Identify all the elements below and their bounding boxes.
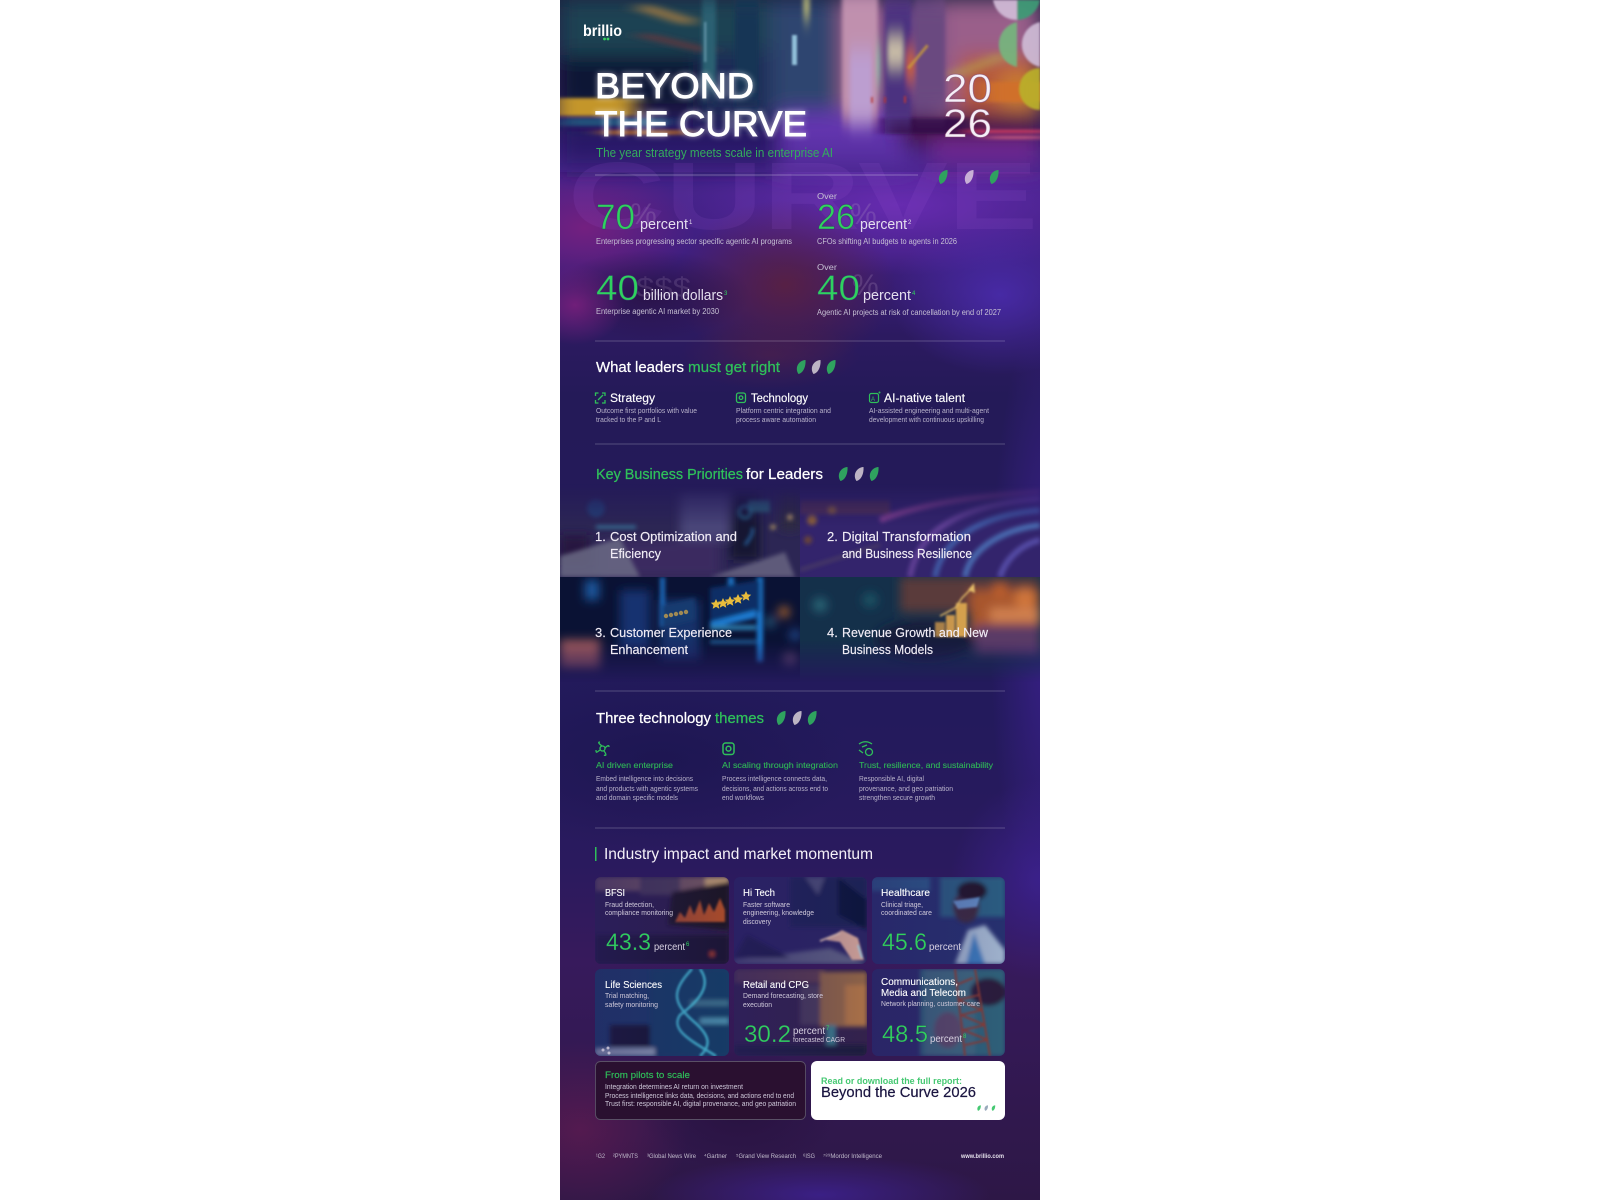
item: strategy: Outcome first portfolios with value [596, 406, 697, 415]
heading: industry impact: Industry impact and market momentum [604, 846, 873, 863]
item: technology: Platform centric integration and [736, 406, 831, 415]
item: strategy: tracked to the P and L [596, 415, 661, 424]
stat: over 40 percent: Agentic AI projects at risk of cancellation by end of 2027 [817, 308, 1002, 317]
theme: AI scaling through integration: end workflows [722, 793, 764, 802]
year 2026 [944, 74, 991, 138]
stat: 40 billion dollars: Enterprise agentic AI market by 2030 [596, 307, 720, 316]
heading: what leaders must get right: What leaders [596, 359, 684, 376]
card: communications, media and telecom: Network planning, customer care [881, 999, 980, 1008]
theme: trust, resilience, sustainability: Trust, resilience, and sustainability [859, 760, 994, 770]
priority 1: cost optimization: 1. [595, 529, 606, 544]
card: Retail and CPG: 30.2 [744, 1021, 791, 1048]
priority 4: revenue growth: Revenue Growth and New [842, 625, 989, 640]
stat: 40 billion dollars: billion dollars [643, 287, 723, 304]
callout: from pilots to scale: Trust first: responsible AI, digital provenance, and geo patriation [605, 1099, 796, 1108]
card: Retail and CPG: Retail and CPG [743, 979, 809, 991]
heading: key business priorities: for Leaders [746, 466, 823, 483]
card: BFSI [595, 877, 729, 964]
card: Retail and CPG: Demand forecasting, store [743, 991, 823, 1000]
leaf motif: hero [939, 170, 999, 184]
website url: www.brillio.com [960, 1153, 1004, 1160]
ghost word CURVE: CURVE [568, 143, 1038, 250]
card: BFSI: percent [654, 942, 685, 953]
stat: 40 billion dollars: 3 [724, 291, 728, 297]
card: Healthcare: coordinated care [881, 908, 932, 917]
card: Life Sciences: Life Sciences [605, 979, 662, 991]
title: THE CURVE [595, 105, 807, 144]
heading: key business priorities: Key Business Priorities [596, 466, 743, 483]
logo: brillio: brillio [583, 23, 622, 40]
item: AI-native talent: development with continuous upskilling [869, 415, 984, 424]
card: Hi Tech: engineering, knowledge [743, 908, 814, 917]
item: strategy [596, 393, 697, 424]
card: Healthcare: percent [929, 942, 961, 953]
footnote sources: ²PYMNTS [613, 1154, 638, 1160]
priority 4: revenue growth: Business Models [842, 642, 933, 657]
card: BFSI: BFSI [605, 887, 625, 899]
stat: 40 billion dollars [596, 275, 728, 316]
theme: AI driven enterprise: and domain specific models [596, 793, 678, 802]
card: Healthcare: Clinical triage, [881, 900, 923, 909]
card: Retail and CPG: percent [793, 1026, 825, 1037]
year 2026: 26 [943, 102, 992, 146]
stat: 70 percent: 1 [689, 220, 693, 226]
card: communications, media and telecom: 48.5 [882, 1021, 928, 1048]
card: Retail and CPG [734, 969, 867, 1056]
stat: 70 percent: 70 [596, 198, 635, 237]
card: Life Sciences: Trial matching, [605, 991, 649, 1000]
heading: key business priorities [596, 466, 879, 483]
year 2026: 20 [943, 67, 992, 111]
theme: AI scaling through integration: AI scaling through integration [722, 760, 838, 770]
card: Healthcare: Healthcare [881, 887, 930, 899]
stat: 70 percent: % [630, 198, 657, 231]
item: strategy: Strategy [610, 393, 655, 405]
stat: over 26 percent: 26 [817, 198, 855, 237]
item: AI-native talent: A [871, 397, 875, 403]
theme: trust, resilience, sustainability: Responsible AI, digital [859, 774, 924, 783]
stat: over 40 percent [817, 262, 1002, 317]
heading: what leaders must get right [596, 359, 836, 376]
card: Hi Tech: Faster software [743, 900, 790, 909]
card: Hi Tech: discovery [743, 917, 771, 926]
heading: three technology themes: Three technology [596, 710, 711, 727]
card: Hi Tech: Hi Tech [743, 887, 775, 899]
stat: 70 percent [596, 203, 792, 246]
callout: from pilots to scale [596, 1062, 806, 1120]
card: BFSI: Fraud detection, [605, 900, 654, 909]
item: AI-native talent: AI-native talent [884, 393, 966, 405]
card: Retail and CPG: execution [743, 1000, 772, 1009]
subtitle: The year strategy meets scale in enterprise AI [596, 146, 833, 160]
card: Hi Tech [734, 877, 867, 964]
stat: 70 percent: percent [640, 216, 689, 233]
footnote sources: ⁷⁸⁹Mordor Intelligence [823, 1153, 883, 1160]
card: communications, media and telecom: 8 [963, 1034, 967, 1040]
card: Life Sciences: safety monitoring [605, 1000, 658, 1009]
theme: AI driven enterprise [596, 742, 698, 802]
stat: over 26 percent: % [850, 198, 877, 231]
title: BEYOND [595, 67, 754, 106]
priority 3: customer experience [560, 577, 800, 674]
theme: trust, resilience, sustainability: provenance, and geo patriation [859, 784, 953, 793]
theme: AI driven enterprise: Embed intelligence into decisions [596, 774, 693, 783]
call to action: read the full report [811, 1061, 1005, 1120]
stat: over 26 percent: Over [817, 191, 837, 201]
stat: over 26 percent: percent [860, 216, 908, 233]
callout: from pilots to scale: Integration determines AI return on investment [605, 1082, 743, 1091]
card: communications, media and telecom: Communications, [881, 976, 958, 988]
call to action: read the full report: Beyond the Curve 2026 [821, 1085, 976, 1101]
card: communications, media and telecom: percent [930, 1034, 962, 1045]
footnote sources: ⁵Grand View Research [736, 1153, 796, 1160]
theme: trust, resilience, sustainability: strengthen secure growth [859, 793, 935, 802]
priority 1: cost optimization: Cost Optimization and [610, 529, 737, 544]
priority 2: digital transformation: Digital Transformation [842, 529, 971, 544]
card: Healthcare: 45.6 [882, 929, 927, 956]
hero city motion-blur image [555, 0, 1050, 172]
stat: over 26 percent [817, 191, 958, 246]
priority 1: cost optimization [560, 494, 800, 577]
priority 4: revenue growth [800, 577, 1040, 685]
page background [560, 0, 1040, 1200]
callout: from pilots to scale: Process intelligence links data, decisions, and actions end to end [605, 1091, 794, 1100]
item: technology: process aware automation [736, 415, 816, 424]
heading: three technology themes [596, 710, 817, 727]
stat: over 40 percent: % [852, 269, 879, 302]
theme: AI scaling through integration [722, 743, 838, 802]
priority 2: digital transformation [800, 482, 1040, 577]
card: communications, media and telecom: Media and Telecom [881, 987, 966, 999]
stat: over 40 percent: 40 [817, 269, 860, 308]
stat: over 26 percent: CFOs shifting AI budgets to agents in 2026 [817, 237, 958, 246]
footnote sources: ¹G2 [596, 1154, 606, 1160]
footnote sources: ³Global News Wire [647, 1154, 697, 1160]
theme: AI scaling through integration: decisions, and actions across end to [722, 784, 828, 793]
stat: over 40 percent: Over [817, 262, 837, 272]
stat: 70 percent: Enterprises progressing sector specific agentic AI programs [596, 237, 792, 246]
item: AI-native talent: AI-assisted engineering and multi-agent [869, 406, 990, 415]
footnote sources [596, 1154, 882, 1160]
priority 1: cost optimization: Eficiency [610, 546, 661, 561]
card: BFSI: compliance monitoring [605, 908, 673, 917]
call to action: read the full report: Read or download the full report: [821, 1076, 962, 1086]
card: BFSI: 43.3 [606, 929, 651, 956]
theme: AI driven enterprise: and products with agentic systems [596, 784, 698, 793]
decorative circle pattern [993, 0, 1040, 110]
title: THE CURVE [595, 105, 807, 144]
card: communications, media and telecom [872, 969, 1006, 1056]
card: Healthcare [870, 877, 1005, 964]
item: technology: Technology [751, 393, 808, 405]
priority 3: customer experience: Enhancement [610, 642, 688, 657]
footnote sources: ⁴Gartner [704, 1153, 727, 1160]
priority 4: revenue growth: 4. [827, 625, 838, 640]
item: AI-native talent [869, 392, 990, 424]
stat: over 26 percent: 2 [908, 220, 912, 226]
theme: trust, resilience, sustainability [859, 742, 994, 802]
stat: over 40 percent: percent [863, 287, 912, 304]
footnote sources: ⁶ISG [803, 1153, 815, 1160]
stat: over 40 percent: 4 [912, 291, 916, 297]
card: Retail and CPG: 7 [826, 1026, 830, 1032]
priority 3: customer experience: Customer Experience [610, 625, 732, 640]
stat: 40 billion dollars: 40 [596, 269, 639, 308]
theme: AI driven enterprise: AI driven enterprise [596, 760, 673, 770]
heading: what leaders must get right: must get right [688, 359, 781, 376]
card: BFSI: 6 [686, 942, 690, 948]
stat: 40 billion dollars: $$$ [636, 272, 692, 303]
card: Retail and CPG: forecasted CAGR [793, 1035, 845, 1044]
title [595, 67, 807, 144]
title: BEYOND [595, 67, 754, 106]
priority 2: digital transformation: and Business Resilience [842, 546, 972, 561]
theme: AI scaling through integration: Process intelligence connects data, [722, 774, 827, 783]
heading: three technology themes: themes [715, 710, 764, 727]
priority 2: digital transformation: 2. [827, 529, 838, 544]
item: technology [736, 393, 831, 424]
callout: from pilots to scale: From pilots to scale [605, 1070, 690, 1081]
card: Life Sciences [595, 969, 729, 1056]
priority 3: customer experience: 3. [595, 625, 606, 640]
